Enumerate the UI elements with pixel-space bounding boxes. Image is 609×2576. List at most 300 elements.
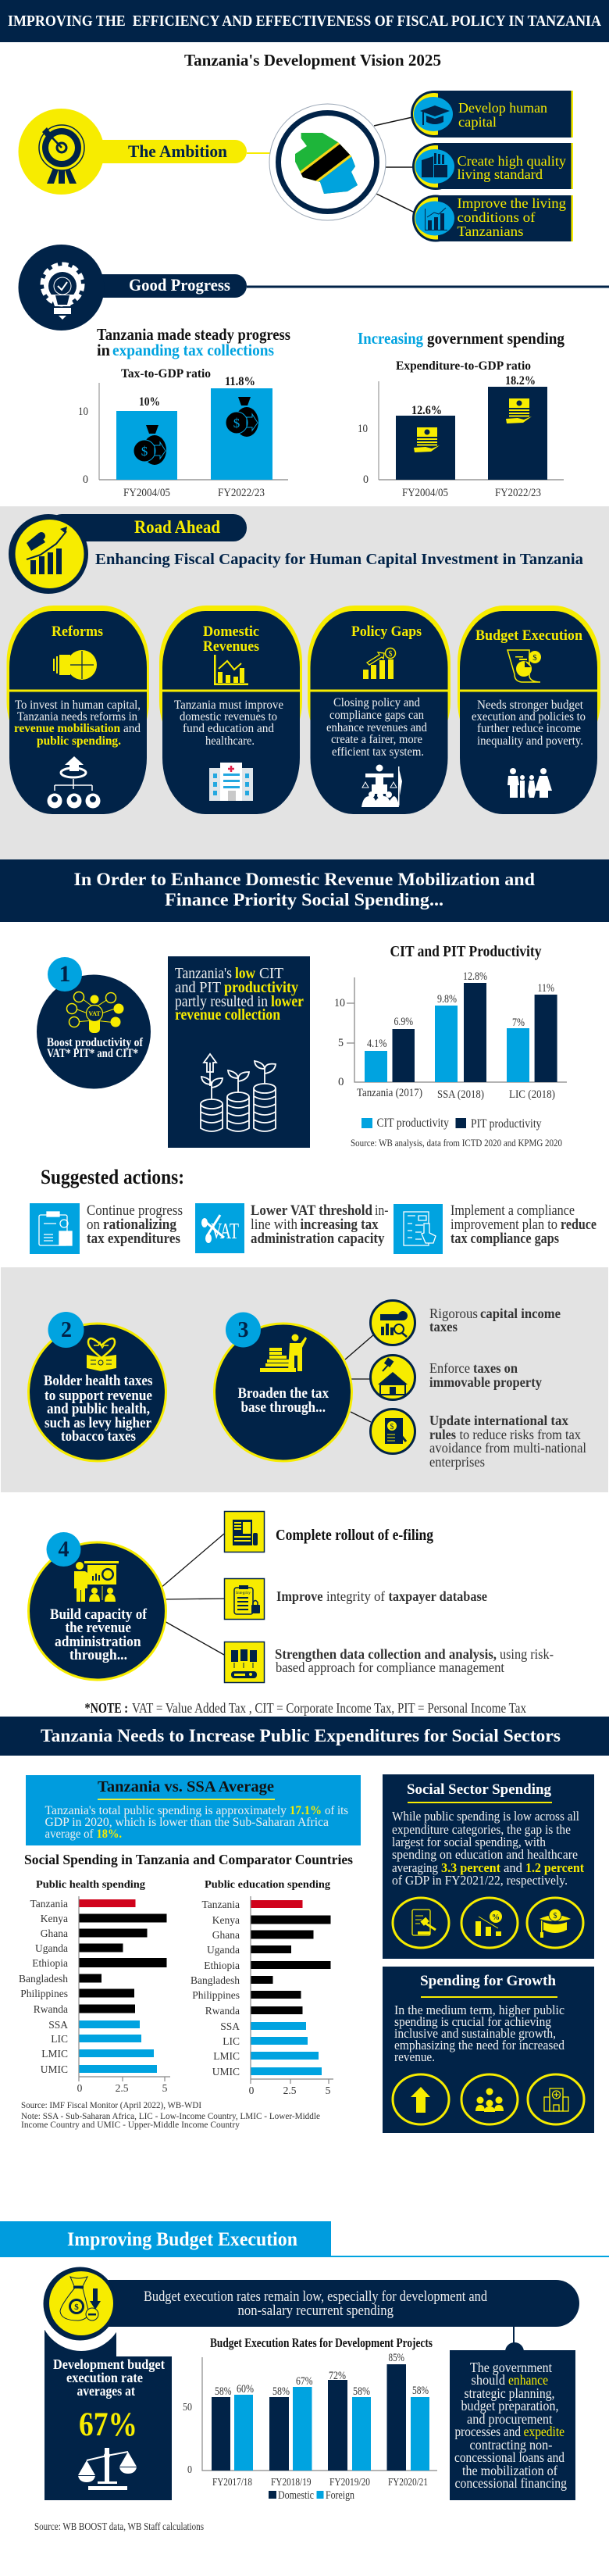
item: international tax rules: avoidance from multi-national	[429, 1440, 586, 1456]
card: domestic revenues	[159, 606, 302, 814]
chart: public health spending: Philippines	[20, 1988, 68, 1999]
note: abbreviations: VAT = Value Added Tax , CIT = Corporate Income Tax, PIT = Personal Income Tax	[132, 1700, 526, 1716]
icon: megaphone and bars	[27, 527, 67, 574]
chart: CIT and PIT productivity: SSA (2018)	[437, 1088, 484, 1101]
chart: budget execution rates: 0	[187, 2463, 192, 2475]
circle: step 3 broaden the tax base: Broaden the tax	[237, 1385, 329, 1402]
item: taxpayer database: Improve	[276, 1588, 323, 1604]
chart: public health spending: 0	[77, 2082, 83, 2094]
panel: government should enhance: should	[472, 2372, 505, 2388]
icon: graduation cap	[420, 105, 450, 125]
text: high quality living standard: Create high quality	[458, 153, 566, 169]
item: data collection and analysis: using risk-	[500, 1646, 554, 1662]
item: data collection and analysis: based approach for compliance management	[276, 1660, 504, 1675]
chart: public education spending: 2.5	[283, 2085, 297, 2096]
circle: step 3 broaden the tax base: base through...	[240, 1399, 326, 1416]
source notes: Source: IMF Fiscal Monitor (April 2022), WB-WDI	[21, 2101, 201, 2110]
icon: falling bars with percent	[461, 1898, 518, 1948]
circle: step 2 health taxes	[28, 1312, 166, 1461]
item: data collection and analysis: Strengthen data collection and analysis,	[275, 1646, 497, 1662]
item: capital income taxes: capital income	[480, 1306, 561, 1321]
text: high quality living standard: living standard	[458, 166, 543, 182]
icon: clipboard with calculator	[39, 1212, 72, 1245]
badge: number 4: 4	[58, 1538, 69, 1562]
icon: speaker at podium	[361, 764, 402, 807]
icon: report scroll: $	[532, 653, 537, 663]
heading: social spending: Social Spending in Tanzania and Comparator Countries	[24, 1852, 353, 1867]
chart: tax-to-gdp ratio: FY2004/05	[123, 487, 170, 499]
text: boost productivity: VAT* PIT* and CIT*	[47, 1047, 138, 1060]
action: lower VAT threshold: in-	[375, 1202, 389, 1219]
item: taxpayer database: taxpayer database	[389, 1588, 487, 1604]
chart: CIT and PIT productivity: 11%	[537, 982, 554, 995]
action: lower VAT threshold	[195, 1202, 389, 1253]
chart: public education spending: Uganda	[207, 1944, 240, 1956]
panel: social sector spending: 3.3 percent	[441, 1860, 500, 1875]
icon: growth bars: $	[389, 650, 392, 659]
panel: government should enhance: concessional financing	[454, 2475, 567, 2491]
card: policy gaps: Closing policy and	[333, 696, 420, 709]
card: policy gaps: efficient tax system.	[332, 745, 424, 759]
panel: low CIT and PIT productivity: lower	[271, 993, 304, 1010]
item: taxes on immovable property: Enforce	[429, 1360, 470, 1376]
heading: tax collections: Tanzania made steady progress	[97, 325, 290, 344]
chart: public education spending: 0	[249, 2085, 255, 2096]
icon: man on coins	[260, 1334, 307, 1372]
panel: low CIT and PIT productivity: productivity	[224, 979, 298, 996]
label: road ahead: Road Ahead	[134, 517, 220, 537]
badge: number 3	[226, 1313, 261, 1347]
icon: money bag going down: $	[74, 2303, 79, 2312]
icon: hospital building	[528, 2074, 584, 2124]
heading: government spending: government spending	[427, 329, 564, 348]
panel: improve living conditions	[412, 195, 573, 242]
icon: hospital	[209, 763, 253, 801]
panel: development budget execution rate: Development budget	[53, 2356, 165, 2372]
badge: number 2: 2	[61, 1318, 72, 1342]
chart: budget execution rates	[183, 2335, 437, 2502]
icon: people hierarchy	[47, 756, 100, 808]
circle: step 2 health taxes: tobacco taxes	[61, 1428, 136, 1445]
chart: budget execution rates: 58%	[272, 2385, 290, 2398]
icon: money in hand	[414, 427, 440, 452]
chart: public education spending: Philippines	[192, 1989, 240, 2001]
panel: government should enhance: strategic planning,	[464, 2385, 554, 2401]
legend: CIT productivity	[376, 1117, 449, 1130]
card: policy gaps: create a fairer, more	[331, 733, 422, 746]
circle: step 4 revenue administration: administration	[55, 1634, 141, 1650]
section banner: domestic revenue mobilization: In Order to Enhance Domestic Revenue Mobilization and	[73, 870, 535, 889]
item: e-filing	[225, 1511, 433, 1552]
chart: budget execution rates: 58%	[412, 2385, 429, 2397]
card: domestic revenues: healthcare.	[205, 734, 255, 748]
icon: VAT person: VAT	[88, 1010, 101, 1017]
icon: tax document	[385, 1418, 406, 1444]
stat: 67%: 67%	[79, 2406, 137, 2443]
chart: budget execution rates: 58%	[215, 2385, 231, 2398]
panel: social sector spending	[383, 1774, 594, 1959]
legend	[269, 2489, 354, 2502]
icon: money bag going down	[60, 2277, 101, 2321]
badge: number 2	[48, 1312, 84, 1348]
panel: social sector spending: averaging	[392, 1860, 438, 1875]
panel: Tanzania vs SSA average: of its	[325, 1804, 348, 1817]
panel: spending for growth: In the medium term, higher public	[394, 2003, 564, 2017]
header band	[0, 0, 609, 42]
action: compliance improvement plan: reduce	[561, 1217, 597, 1233]
chart: public education spending: LIC	[223, 2035, 240, 2047]
section banner: public expenditures	[0, 1717, 609, 1756]
text: develop human capital: capital	[458, 114, 497, 130]
chart: public education spending: Bangladesh	[191, 1974, 240, 1986]
chart: CIT and PIT productivity: Tanzania (2017)	[357, 1087, 422, 1099]
icon: chart and magnifier	[380, 1311, 408, 1337]
section banner: public expenditures: Tanzania Needs to Increase Public Expenditures for Social Sectors	[41, 1726, 561, 1745]
panel: spending for growth: revenue.	[394, 2049, 435, 2064]
chart: public health spending: Uganda	[35, 1942, 68, 1954]
card: budget execution: execution and policies to	[472, 710, 586, 723]
text: improve living conditions: Tanzanians	[458, 223, 523, 239]
icon: growth bars	[363, 648, 395, 679]
badge: number 1	[48, 957, 82, 991]
card: budget execution	[458, 606, 600, 814]
legend	[361, 1117, 542, 1131]
chart: CIT and PIT productivity: LIC (2018)	[509, 1088, 555, 1101]
card: policy gaps: Policy Gaps	[351, 623, 422, 640]
chart: public health spending: Bangladesh	[19, 1973, 68, 1985]
icon: up arrow	[393, 2074, 449, 2124]
chart: expenditure-to-gdp ratio	[358, 359, 564, 499]
panel: the ambition	[19, 109, 270, 195]
item: taxes on immovable property: immovable property	[429, 1374, 542, 1390]
note: abbreviations: *NOTE :	[84, 1700, 128, 1716]
icon: health budget gavel	[393, 1898, 449, 1948]
panel: low CIT and PIT productivity: Tanzania's	[175, 965, 232, 982]
chart: tax-to-gdp ratio	[78, 367, 288, 499]
action: lower VAT threshold: increasing tax	[300, 1217, 379, 1233]
chart: public education spending: Ethiopia	[204, 1960, 240, 1971]
icon: family	[508, 768, 552, 798]
chart title: Public education spending	[205, 1879, 330, 1891]
chart: public health spending: SSA	[48, 2019, 68, 2031]
heading: enhancing fiscal capacity: Enhancing Fiscal Capacity for Human Capital Investment in Tanzania	[95, 551, 583, 568]
chart: CIT and PIT productivity: 7%	[512, 1016, 525, 1029]
item: international tax rules: Update international tax	[429, 1413, 568, 1428]
panel: government should enhance: The government	[470, 2360, 552, 2375]
chart: budget execution rates: 72%	[329, 2370, 346, 2382]
chart: CIT and PIT productivity: 4.1%	[367, 1038, 387, 1050]
icon: factory building	[422, 153, 447, 177]
source notes: Note: SSA - Sub-Saharan Africa, LIC - Low-Income Country, LMIC - Lower-Middle	[21, 2112, 320, 2121]
card: budget execution: Needs stronger budget	[477, 698, 584, 712]
text: develop human capital: Develop human	[458, 100, 547, 116]
card: domestic revenues: Domestic	[203, 623, 259, 640]
panel: Tanzania vs SSA average: 18%.	[97, 1827, 122, 1841]
heading: suggested actions: Suggested actions:	[41, 1166, 184, 1188]
chart: expenditure-to-gdp ratio: FY2022/23	[495, 487, 541, 499]
item: capital income taxes	[370, 1300, 561, 1345]
icon: graduation cap with coin: $	[553, 1912, 557, 1920]
circle: step 4 revenue administration: the revenue	[66, 1620, 131, 1636]
panel: step 1 boost productivity	[37, 957, 151, 1089]
chart title: CIT and PIT Productivity	[390, 943, 542, 960]
panel: steps 2 and 3	[1, 1267, 608, 1492]
chart: public education spending: Rwanda	[205, 2005, 240, 2017]
panel: high quality living standard	[412, 143, 573, 190]
card: reforms: revenue mobilisation	[14, 722, 120, 735]
section banner: improving budget execution: Improving Budget Execution	[67, 2229, 297, 2250]
action: lower VAT threshold: administration capacity	[251, 1231, 385, 1247]
circle: step 4 revenue administration: through...	[69, 1647, 127, 1663]
chart title: Tax-to-GDP ratio	[121, 367, 211, 381]
chart: tax-to-gdp ratio: 11.8%	[225, 375, 255, 388]
icon: scissors cutting VAT	[201, 1215, 239, 1244]
panel: government should enhance: the mobilization of	[462, 2463, 557, 2478]
chart: public education spending: 5	[326, 2085, 331, 2096]
chart: public health spending: 5	[162, 2082, 168, 2094]
card: reforms: Reforms	[52, 623, 103, 640]
icon: money bag: $	[141, 444, 148, 459]
panel: development budget execution rate	[39, 2267, 172, 2500]
text: improve living conditions: Improve the living	[458, 195, 566, 211]
chart: public health spending: Ethiopia	[32, 1957, 68, 1969]
icon: puzzle bulb	[53, 650, 97, 680]
item: taxes on immovable property: taxes on	[473, 1360, 518, 1376]
panel: social sector spending: of GDP in FY2021/22, respectively.	[392, 1873, 568, 1888]
panel: government should enhance: and procurement	[467, 2411, 553, 2427]
source note: Source: WB analysis, data from ICTD 2020 and KPMG 2020	[351, 1137, 562, 1149]
card: domestic revenues: Tanzania must improve	[174, 698, 283, 712]
heading: government spending: Increasing	[358, 329, 423, 348]
heading: tax collections: expanding tax collections	[112, 341, 274, 359]
card: policy gaps: enhance revenues and	[326, 721, 427, 734]
item: international tax rules: rules	[429, 1427, 456, 1442]
action: lower VAT threshold: line with	[251, 1217, 297, 1233]
icon: group of people	[461, 2074, 518, 2124]
chart: public education spending	[191, 1879, 333, 2096]
text: improve living conditions: conditions of	[458, 209, 536, 225]
chart: public health spending: LMIC	[41, 2048, 68, 2060]
chart title: Public health spending	[36, 1879, 145, 1891]
chart: CIT and PIT productivity: 10	[334, 997, 345, 1009]
panel: spending for growth: spending is crucial for achieving	[394, 2014, 551, 2029]
action: rationalizing tax expenditures: tax expenditures	[87, 1231, 180, 1247]
chart: CIT and PIT productivity: 12.8%	[463, 970, 487, 983]
icon: checklist with hand	[404, 1212, 436, 1245]
panel: Tanzania vs SSA average	[26, 1775, 361, 1845]
item: international tax rules	[370, 1409, 586, 1470]
chart: budget execution rates: 60%	[237, 2383, 254, 2396]
card: reforms: To invest in human capital,	[15, 698, 141, 712]
chart: budget execution rates: FY2018/19	[271, 2477, 311, 2488]
item: taxpayer database: integrity of	[326, 1588, 385, 1604]
icon: balance scale	[78, 2448, 137, 2490]
chart: budget execution rates: FY2017/18	[212, 2477, 252, 2488]
icon: heart stethoscope book	[87, 1338, 116, 1371]
icon: graduation cap with coin	[527, 1898, 583, 1948]
item: capital income taxes: Rigorous	[429, 1306, 478, 1321]
icon: line and bar chart	[214, 655, 248, 685]
icon: money bag: $	[233, 416, 240, 431]
icon: target	[39, 125, 84, 184]
item: data collection and analysis	[225, 1642, 554, 1683]
item: e-filing: Complete rollout of e-filing	[276, 1527, 433, 1544]
chart title: Budget Execution Rates for Development Projects	[210, 2335, 433, 2350]
chart: public education spending: Tanzania	[201, 1899, 240, 1910]
card: domestic revenues: fund education and	[183, 722, 274, 735]
panel: government should enhance: processes and	[454, 2424, 521, 2439]
section banner: domestic revenue mobilization	[0, 859, 609, 922]
chart: CIT and PIT productivity	[334, 943, 567, 1131]
banner: budget execution rates remain low: non-salary recurrent spending	[237, 2303, 394, 2319]
icon: bulb with gear	[43, 265, 82, 320]
panel: develop human capital	[411, 91, 573, 138]
chart: tax-to-gdp ratio: FY2022/23	[218, 487, 265, 499]
chart: public education spending: Ghana	[212, 1929, 240, 1941]
icon: money bag	[134, 425, 166, 465]
card: reforms: Tanzania needs reforms in	[17, 710, 137, 723]
chart: tax-to-gdp ratio: 0	[83, 473, 88, 486]
chart: CIT and PIT productivity: 9.8%	[437, 993, 457, 1006]
badge: number 4	[47, 1532, 81, 1567]
card: reforms: and	[123, 722, 141, 735]
chart: public education spending: SSA	[220, 2020, 240, 2032]
circle: step 2 health taxes: Bolder health taxes	[44, 1373, 153, 1389]
panel: development budget execution rate: execution rate	[66, 2370, 143, 2385]
chart: public health spending: Tanzania	[30, 1898, 68, 1910]
circle: step 2 health taxes: and public health,	[47, 1401, 150, 1417]
icon: clipboard with padlock: Integrity	[236, 1591, 251, 1595]
icon: gavel and house	[378, 1357, 408, 1395]
chart: budget execution rates: FY2019/20	[329, 2477, 370, 2488]
banner: budget execution rates remain low: Budget execution rates remain low, especially for development and	[144, 2288, 487, 2305]
icon: scissors cutting VAT: VAT	[211, 1219, 239, 1244]
chart: public health spending: 2.5	[116, 2082, 129, 2094]
panel: social sector spending: largest for social spending, with	[392, 1835, 547, 1849]
source note: Source: WB BOOST data, WB Staff calculations	[34, 2521, 204, 2532]
icon: falling bars with percent: %	[492, 1913, 500, 1922]
action: rationalizing tax expenditures: on	[87, 1217, 100, 1233]
item: taxes on immovable property	[370, 1355, 542, 1400]
panel: government should enhance: expedite	[524, 2424, 564, 2439]
action: lower VAT threshold: Lower VAT threshold	[251, 1202, 372, 1219]
action: rationalizing tax expenditures: Continue progress	[87, 1202, 183, 1219]
chart: expenditure-to-gdp ratio: 0	[363, 473, 369, 486]
legend: PIT productivity	[471, 1117, 542, 1131]
chart title: Expenditure-to-GDP ratio	[396, 359, 531, 373]
chart: expenditure-to-gdp ratio: FY2004/05	[402, 487, 448, 499]
circle: step 2 health taxes: to support revenue	[45, 1388, 152, 1404]
action: rationalizing tax expenditures	[30, 1202, 183, 1254]
icon: report scroll	[508, 650, 541, 682]
legend: Domestic	[278, 2489, 314, 2502]
panel: government should enhance: contracting non-	[470, 2437, 553, 2453]
panel: spending for growth: emphasizing the need for increased	[394, 2038, 565, 2053]
circle: step 4 revenue administration	[28, 1532, 166, 1680]
chart: budget execution rates: 58%	[353, 2385, 370, 2398]
panel: Tanzania vs SSA average: Tanzania vs. SSA Average	[98, 1778, 274, 1795]
chart: tax-to-gdp ratio: 10	[78, 406, 88, 418]
text: boost productivity: Boost productivity of	[47, 1036, 144, 1049]
section banner: improving budget execution	[0, 2221, 609, 2257]
panel: low CIT and PIT productivity: and PIT	[175, 979, 221, 996]
card: reforms	[6, 606, 149, 814]
label: the ambition: The Ambition	[128, 141, 227, 161]
panel: social sector spending: spending on education and healthcare	[392, 1847, 578, 1862]
action: compliance improvement plan: tax compliance gaps	[451, 1231, 559, 1247]
legend: Foreign	[326, 2489, 354, 2502]
panel: low CIT and PIT productivity: partly resulted in	[175, 993, 268, 1010]
icon: tanzania map in ring	[269, 104, 386, 220]
chart: budget execution rates: 50	[183, 2401, 192, 2413]
chart: CIT and PIT productivity: 5	[338, 1037, 344, 1049]
card: policy gaps	[308, 606, 451, 814]
panel: spending for growth: Spending for Growth	[420, 1974, 557, 1989]
panel: low CIT and PIT productivity: CIT	[259, 965, 283, 982]
icon: tax document: $	[390, 1423, 394, 1431]
chart: expenditure-to-gdp ratio: 12.6%	[411, 404, 442, 417]
chart: public education spending: LMIC	[213, 2050, 240, 2062]
item: international tax rules: enterprises	[429, 1454, 485, 1470]
panel: government should enhance: concessional loans and	[454, 2449, 564, 2465]
panel: social sector spending: While public spending is low across all	[392, 1809, 579, 1824]
card: budget execution: further reduce income	[477, 722, 581, 735]
chart: public health spending: UMIC	[41, 2063, 68, 2075]
connector lines	[345, 1334, 374, 1422]
panel: development budget execution rate: averages at	[77, 2383, 135, 2399]
panel: Tanzania vs SSA average: 17.1%	[290, 1804, 322, 1817]
chart: budget execution rates: FY2020/21	[388, 2477, 428, 2488]
action: compliance improvement plan: improvement plan to	[451, 1217, 557, 1233]
panel: spending for growth: inclusive and sustainable growth,	[394, 2026, 556, 2041]
item: taxpayer database	[225, 1578, 487, 1619]
badge: number 3: 3	[237, 1318, 248, 1342]
icon: clipboard with padlock	[234, 1585, 260, 1614]
chart: public education spending: Kenya	[212, 1914, 240, 1926]
panel: social sector spending: Social Sector Spending	[407, 1782, 552, 1798]
panel: government should enhance: budget preparation,	[461, 2398, 559, 2413]
source notes: Income Country and UMIC - Upper-Middle Income Country	[21, 2120, 240, 2130]
icon: trainer with board	[74, 1561, 119, 1602]
chart: public health spending: LIC	[51, 2033, 68, 2045]
panel: low CIT and PIT productivity: low	[235, 965, 255, 982]
circle: step 2 health taxes: such as levy higher	[45, 1415, 151, 1431]
panel: good progress banner	[19, 245, 609, 330]
panel: government should enhance: enhance	[508, 2372, 548, 2388]
card: domestic revenues: Revenues	[203, 638, 259, 655]
panel: Tanzania vs SSA average: Tanzania's total public spending is approximately	[45, 1804, 287, 1817]
panel: low CIT and PIT productivity	[168, 956, 310, 1148]
action: compliance improvement plan	[394, 1202, 597, 1254]
chart: public health spending	[19, 1879, 170, 2094]
icon: money bag	[226, 397, 258, 437]
chart: CIT and PIT productivity: 6.9%	[394, 1016, 413, 1028]
chart: public health spending: Rwanda	[34, 2003, 68, 2015]
panel: social sector spending: and	[504, 1860, 523, 1875]
circle: step 4 revenue administration: Build capacity of	[50, 1606, 148, 1623]
panel: road ahead	[0, 506, 609, 859]
circle: step 3 broaden the tax base	[214, 1313, 351, 1461]
icon: data server	[231, 1649, 257, 1678]
card: policy gaps: compliance gaps can	[329, 709, 424, 722]
item: international tax rules: to reduce risks from tax	[459, 1427, 581, 1442]
icon: VAT person	[67, 992, 123, 1033]
connector lines	[160, 1534, 224, 1655]
panel: low CIT and PIT productivity: revenue collection	[175, 1006, 280, 1024]
chart: expenditure-to-gdp ratio: 18.2%	[505, 374, 536, 388]
action: compliance improvement plan: Implement a compliance	[451, 1202, 575, 1219]
label: good progress: Good Progress	[129, 275, 230, 295]
